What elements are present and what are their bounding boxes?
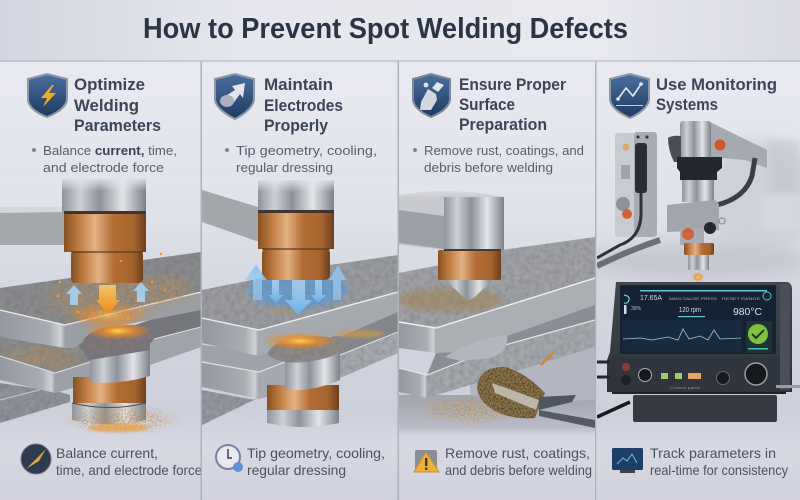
bullet text: Tip geometry, cooling, (236, 143, 377, 158)
caption (445, 445, 592, 478)
icon: brush shield (413, 74, 450, 117)
panel: ensure proper surface preparation (398, 62, 595, 500)
bullet text (413, 143, 584, 175)
caption: Track parameters in (650, 445, 776, 461)
icon: lightning shield (28, 74, 67, 117)
bullet text: and electrode force (43, 160, 164, 175)
heading: Surface (459, 96, 515, 114)
screen: 17.65A (640, 295, 662, 302)
screen: 980°C (733, 307, 762, 318)
screen: 39% (631, 306, 642, 312)
heading: Maintain (264, 76, 333, 94)
bullet text: Balance current, time, (43, 143, 177, 158)
caption (247, 445, 385, 478)
screen: RESET RANGE (722, 296, 760, 301)
heading: Preparation (459, 116, 547, 134)
panel: optimize welding parameters (0, 62, 202, 500)
caption: real-time for consistency (650, 462, 788, 478)
welding head machine (597, 121, 767, 282)
welding illustration (202, 180, 398, 427)
heading (459, 76, 567, 134)
panel: maintain electrodes properly (202, 62, 398, 500)
heading (264, 76, 343, 135)
caption (650, 445, 788, 478)
caption (56, 448, 200, 477)
welding illustration (398, 191, 595, 435)
sparks (56, 253, 166, 320)
arrows: force and current (66, 282, 149, 314)
title: How to Prevent Spot Welding Defects (143, 13, 628, 45)
bullet text (225, 143, 377, 175)
heading (656, 76, 777, 114)
heading: Parameters (74, 117, 161, 135)
heading: Electrodes (264, 97, 343, 115)
controls (621, 362, 768, 390)
panel: use monitoring systems (590, 62, 800, 500)
heading: Ensure Proper (459, 76, 567, 94)
bullet text: debris before welding (424, 160, 553, 175)
heading (74, 78, 160, 131)
icon: compass gauge (21, 444, 51, 474)
caption: Tip geometry, cooling, (247, 445, 385, 461)
controls: Control panel (670, 386, 700, 390)
heading: Properly (264, 117, 329, 135)
icon: chart shield (610, 74, 649, 118)
caption: and debris before welding (445, 462, 592, 478)
caption: time, and electrode force (56, 462, 202, 478)
arrows: cooling flow (245, 265, 346, 315)
monitor device (597, 282, 800, 422)
fog (590, 140, 800, 282)
heading: Use Monitoring (656, 76, 777, 94)
caption: Remove rust, coatings, (445, 445, 590, 461)
icon: warning (414, 450, 439, 472)
icon: monitor chart (612, 448, 643, 473)
screen (620, 285, 776, 354)
caption: Balance current, (56, 445, 158, 461)
heading: Systems (656, 96, 718, 114)
bullet text: Remove rust, coatings, and (424, 143, 584, 158)
screen: 120 rpm (679, 307, 701, 314)
heading: Optimize (74, 76, 145, 94)
caption: regular dressing (247, 462, 346, 478)
welding illustration (0, 178, 201, 435)
screen: MAIN GAUGE PRESS (669, 296, 717, 301)
bullet text (32, 146, 176, 172)
icon: wire brush (477, 352, 595, 428)
icon: clock (216, 445, 243, 472)
fog over electrode tops (0, 177, 594, 198)
icon: electrode shield (215, 74, 254, 119)
heading: Welding (74, 97, 139, 115)
bullet text: regular dressing (236, 160, 333, 175)
